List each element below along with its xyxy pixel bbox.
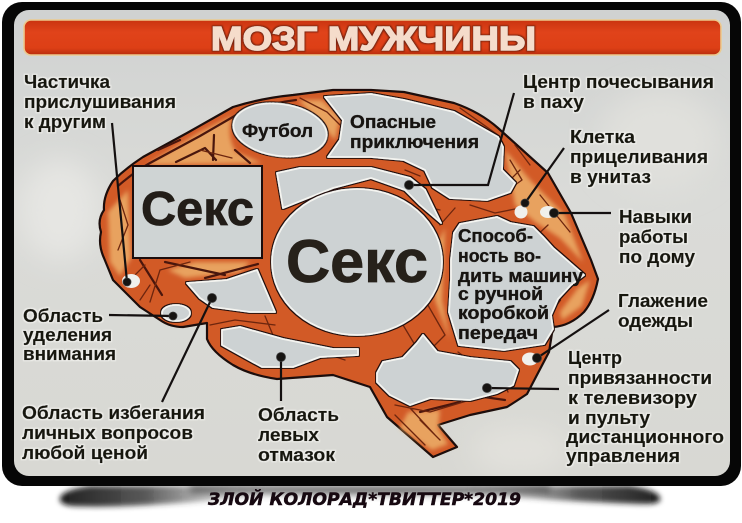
label: Глажение одежды: одежды — [618, 311, 693, 331]
label: Частичка прислушивания: к другим — [24, 112, 106, 132]
label: Глажение одежды — [618, 291, 708, 331]
label: Частичка прислушивания: прислушивания — [24, 92, 176, 112]
label: Центр почесывания: Центр почесывания — [523, 72, 714, 92]
leader: левые отмазки — [276, 352, 286, 401]
label: Область левых отмазок — [258, 405, 339, 465]
label: Центр почесывания: в паху — [523, 92, 584, 112]
label: Клетка прицеливания: Клетка — [570, 127, 636, 147]
leader lines and dots — [109, 93, 611, 402]
region: Футбол oval — [230, 98, 330, 162]
region: избегание вопросов — [187, 270, 275, 312]
lighter cortex patches — [108, 100, 590, 450]
title: МОЗГ МУЖЧИНЫ — [211, 20, 536, 57]
label: Клетка прицеливания: в унитаз — [570, 167, 651, 187]
leader: избегания — [162, 294, 216, 402]
region: глажение — [522, 352, 538, 366]
region: навыки работы — [540, 206, 556, 218]
brain silhouette — [100, 90, 598, 457]
label: Центр почесывания — [523, 72, 714, 112]
label: Область уделения внимания: внимания — [23, 344, 116, 364]
label: Область избегания — [22, 403, 205, 463]
label: Навыки работы: по дому — [619, 247, 695, 267]
label: Область избегания: Область избегания — [22, 403, 205, 423]
text: Секс big: Секс — [286, 228, 428, 295]
label: Центр привязанности: и пульту — [568, 408, 650, 428]
label: Клетка прицеливания — [570, 127, 708, 187]
region: малый Секс square — [133, 166, 262, 258]
label: Область уделения внимания: Область — [23, 306, 103, 326]
leader: глажение — [532, 310, 609, 362]
label: Область избегания: личных вопросов — [22, 423, 193, 443]
label: Центр привязанности: управления — [566, 446, 680, 466]
region: способность водить — [449, 217, 584, 350]
leader: клетка — [521, 148, 564, 207]
label: Навыки работы: работы — [619, 227, 688, 247]
label: Центр привязанности: Центр — [568, 348, 622, 368]
label: Навыки работы — [619, 207, 695, 267]
leader: частичка — [112, 123, 131, 286]
text: Способность водить машину: с ручной — [458, 284, 543, 304]
label: Частичка прислушивания — [24, 72, 176, 132]
label: Область уделения внимания — [23, 306, 116, 364]
title bar — [24, 20, 721, 57]
text: Опасные приключения: приключения — [350, 132, 479, 152]
drop shadow under frame — [60, 486, 660, 507]
watermark caption: ЗЛОЙ КОЛОРАД*ТВИТТЕР*2019 — [207, 488, 521, 510]
region: клетка прицеливания — [514, 206, 528, 218]
leader: уделения — [109, 312, 177, 320]
region: Опасные приключения — [325, 94, 515, 200]
text: Способность водить машину: Способ- — [458, 226, 533, 246]
label: Область левых отмазок: левых — [258, 425, 319, 445]
leader: навыки — [550, 208, 611, 218]
text: Способность водить машину: передач — [458, 323, 538, 343]
label: Центр привязанности — [566, 348, 724, 466]
label: Клетка прицеливания: прицеливания — [570, 147, 708, 167]
brain illustration — [100, 90, 598, 457]
label: Область левых отмазок: отмазок — [258, 445, 336, 465]
label: Центр привязанности: дистанционного — [566, 427, 724, 447]
label: Область избегания: любой ценой — [22, 443, 148, 463]
leader: привязанность — [482, 384, 559, 392]
text: Способность водить машину — [458, 226, 583, 343]
label: Центр привязанности: к телевизору — [568, 388, 697, 408]
region: центр почесывания — [277, 168, 441, 223]
label: Навыки работы: Навыки — [619, 207, 692, 227]
label: Область левых отмазок: Область — [258, 405, 339, 425]
region: большой Секс circle — [272, 189, 442, 335]
region: левые отмазки — [222, 327, 358, 367]
text: Секс small: Секс — [141, 183, 254, 236]
text: Способность водить машину: ность во- — [458, 246, 541, 266]
text: Опасные приключения — [350, 112, 479, 152]
label: Центр привязанности: привязанности — [568, 368, 712, 388]
leader: центр почесывания — [404, 93, 514, 190]
region: область уделения внимания — [162, 305, 190, 321]
text: Способность водить машину: коробкой — [458, 303, 549, 323]
text: Опасные приключения: Опасные — [350, 112, 436, 132]
label: Глажение одежды: Глажение — [618, 291, 708, 311]
text: Футбол: Футбол — [242, 121, 313, 141]
region: привязанность к телевизору — [377, 335, 518, 405]
label: Частичка прислушивания: Частичка — [24, 72, 111, 92]
text: Способность водить машину: дить машину — [458, 266, 583, 286]
region: частичка прислушивания — [122, 274, 140, 288]
label: Область уделения внимания: уделения — [23, 325, 112, 345]
brain veins — [118, 98, 572, 445]
